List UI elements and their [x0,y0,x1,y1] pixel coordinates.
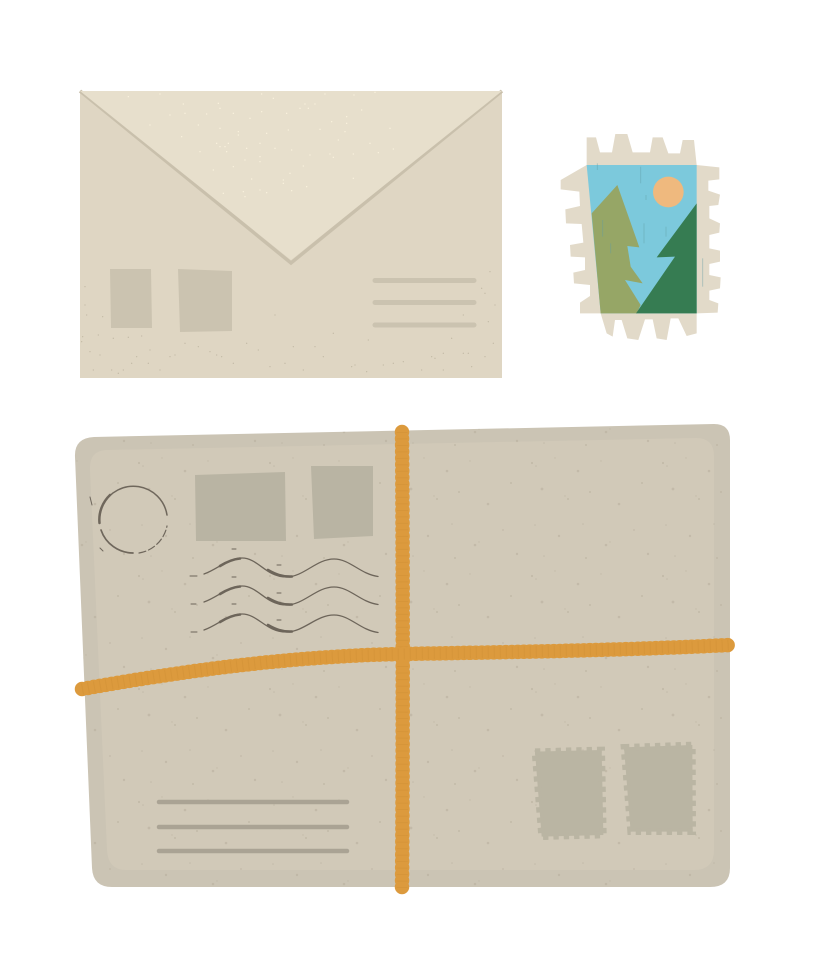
stamp wear marks [597,163,703,287]
envelope speckled lower edge [82,272,495,373]
stamp sun [653,177,684,207]
envelope [80,91,502,378]
parcel stamp placeholder wide [195,472,286,541]
parcel inner panel [90,438,714,870]
wavy postmark [190,549,378,632]
envelope body [80,91,502,378]
perforated mark left [535,750,603,837]
stamp perforated paper [561,134,721,340]
horizontal twine [82,645,729,689]
postage stamp [561,134,721,340]
perforated stamp marks [535,745,693,837]
envelope stamp placeholder right [178,269,232,332]
stamp dark green tree [636,203,697,313]
flap speckles [128,92,393,197]
parcel outer wrap [75,424,730,887]
parcel [75,424,730,888]
stamp light green tree [592,185,643,313]
stamp sky [587,165,697,313]
envelope stamp placeholder left [110,269,152,328]
vertical twine [396,432,408,888]
envelope address lines [375,280,474,325]
envelope flap [80,91,502,263]
perforated mark right [624,745,693,832]
parcel address lines [159,802,347,851]
round postmark [90,486,167,553]
parcel speckles [75,424,730,887]
parcel stamp placeholder narrow [311,466,373,539]
